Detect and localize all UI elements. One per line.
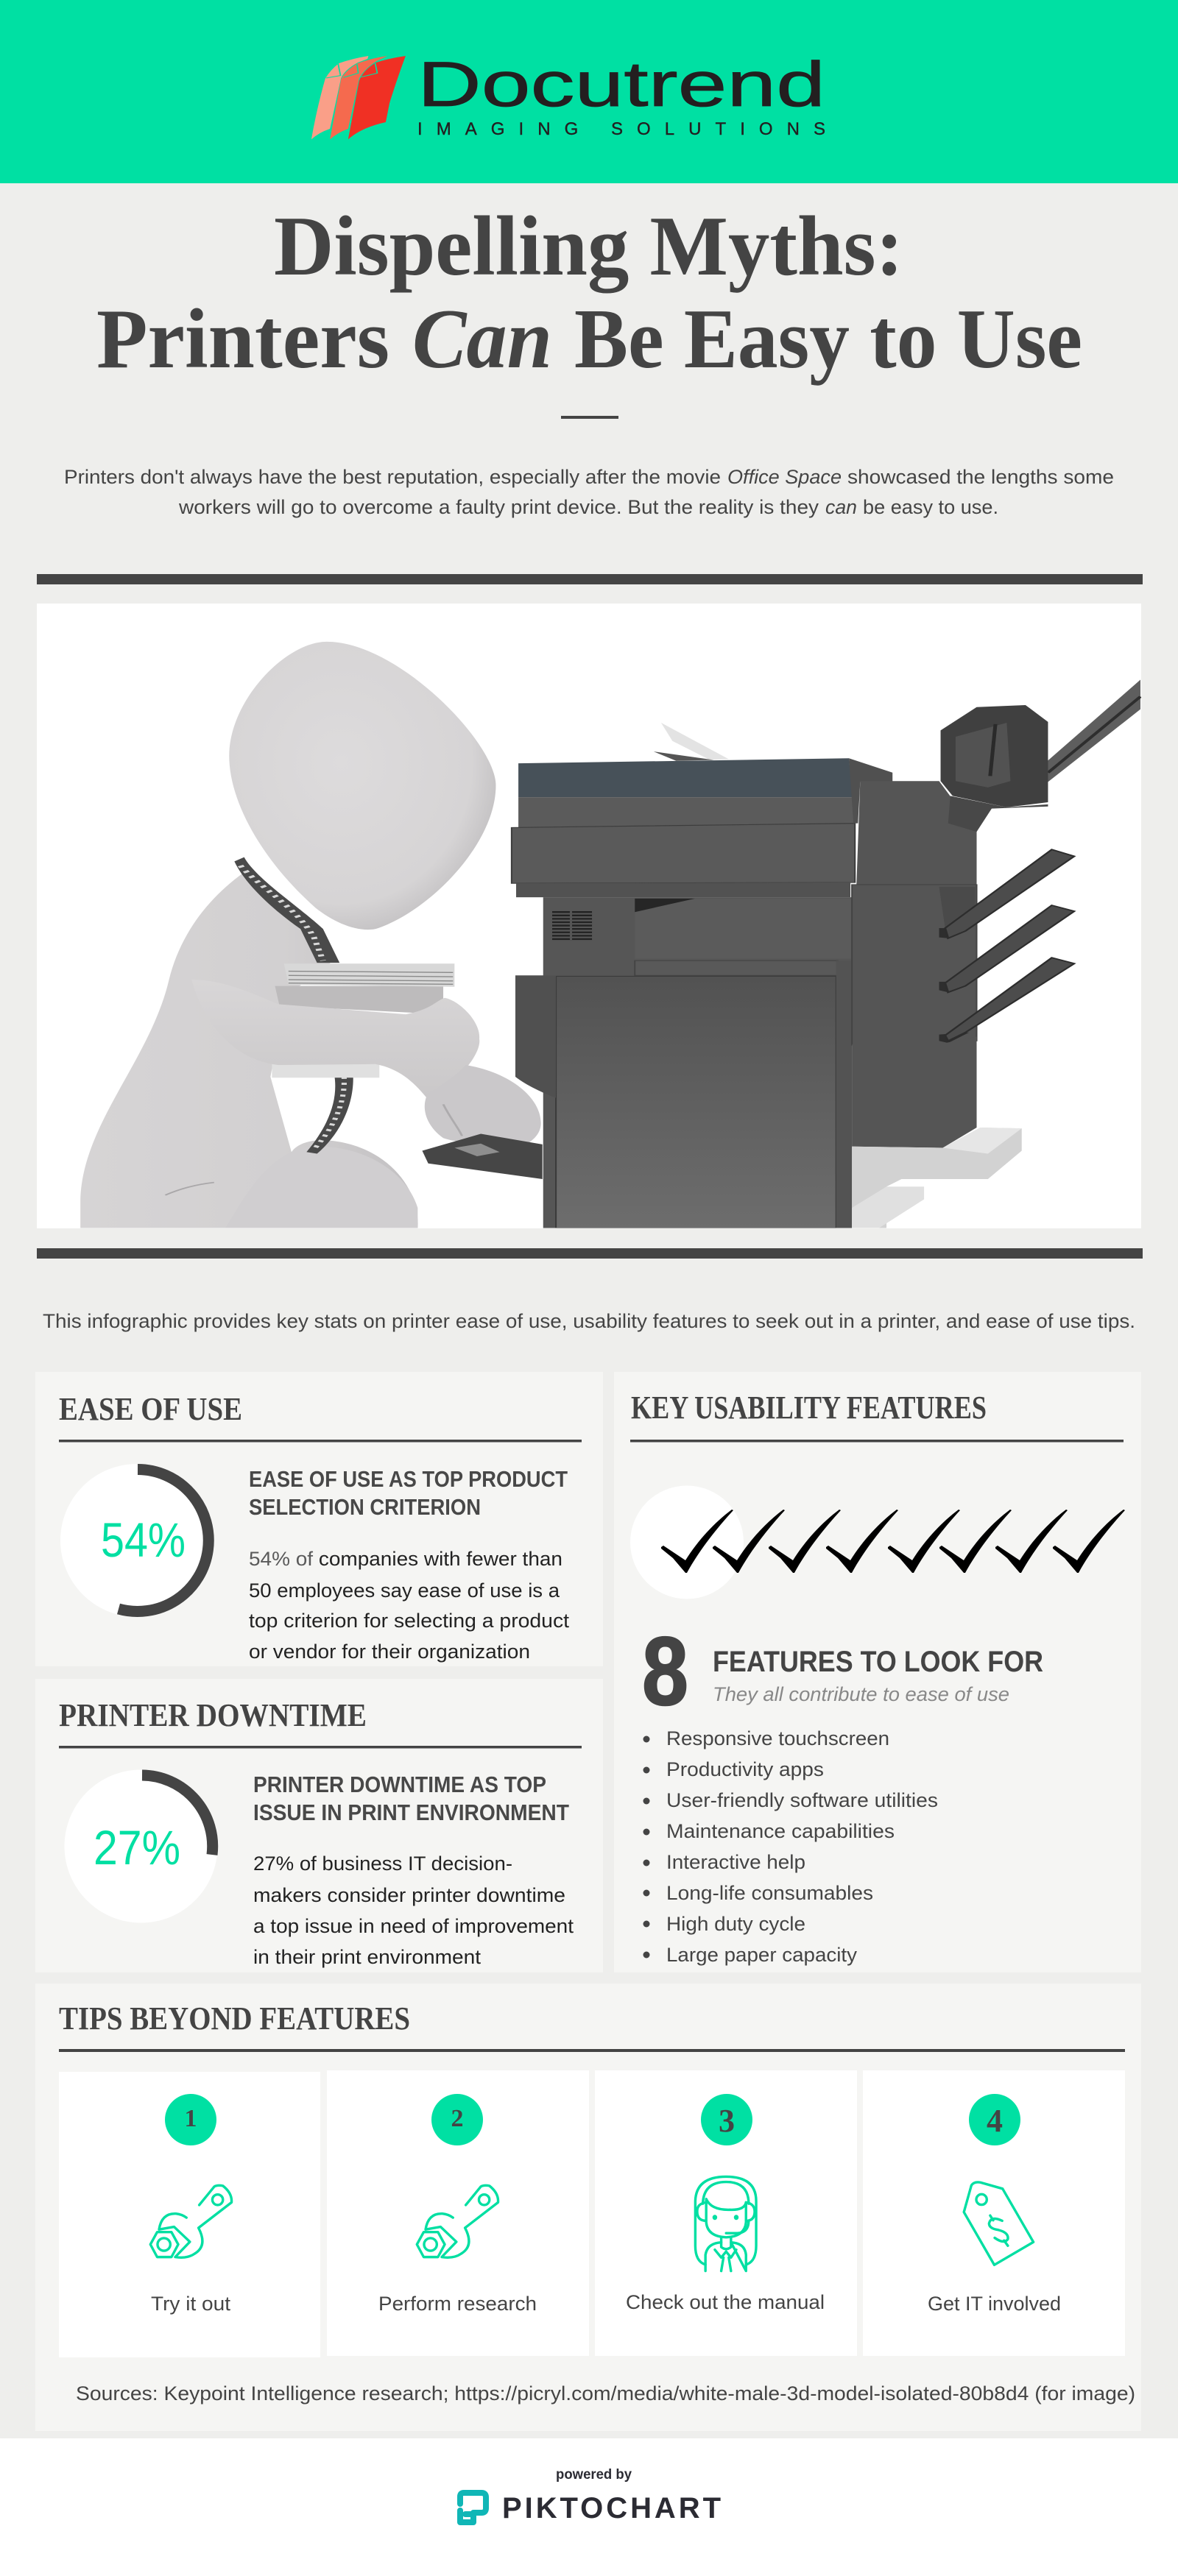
arm and hands	[272, 998, 480, 1097]
subheading: PRINTER DOWNTIME AS TOP	[253, 1772, 546, 1797]
title: Can	[412, 292, 552, 386]
subheading	[253, 1772, 569, 1825]
icon: wrench and nut	[417, 2185, 498, 2257]
icon: support person with headset	[695, 2176, 756, 2271]
panel: ease of use	[35, 1372, 603, 1666]
top output arm	[1048, 680, 1140, 782]
tip card 1	[59, 2072, 320, 2357]
header banner	[0, 0, 1178, 183]
base shelf	[852, 1128, 1022, 1228]
logo: Docutrend: IMAGING SOLUTIONS	[417, 119, 825, 139]
feature list: High duty cycle	[666, 1913, 805, 1935]
footer: powered by Piktochart	[0, 2438, 1178, 2576]
tip card 3: 3	[719, 2103, 735, 2139]
body text: 27% of business IT decision-	[253, 1853, 512, 1875]
title: Be Easy to Use	[574, 292, 1082, 386]
summary sentence: This infographic provides key stats on printer ease of use, usability features to seek out in a printer, and ease of use tips.	[43, 1310, 1135, 1332]
panel: tips beyond features	[35, 1984, 1141, 2431]
body text	[253, 1853, 574, 1968]
tip card 4: 4	[987, 2103, 1003, 2139]
subheading	[249, 1466, 568, 1520]
feature list: User-friendly software utilities	[666, 1789, 938, 1811]
intro paragraph	[64, 466, 1114, 518]
paper feeder	[661, 723, 729, 760]
tie	[234, 857, 339, 963]
tip card 2: Perform research	[378, 2293, 537, 2315]
feature list: Long-life consumables	[666, 1882, 873, 1904]
tip card 4	[863, 2070, 1125, 2356]
footer: powered by Piktochart: powered by	[556, 2467, 632, 2483]
body text: 50 employees say ease of use is a	[249, 1579, 560, 1602]
feature list: Productivity apps	[666, 1758, 824, 1780]
heading: ease of use: EASE OF USE	[59, 1391, 242, 1427]
logo: Docutrend: Docutrend	[417, 49, 825, 120]
tip card 3	[595, 2070, 857, 2356]
heading: key usability features: KEY USABILITY FEATURES	[631, 1390, 987, 1426]
figure body	[80, 870, 418, 1228]
heading: printer downtime: PRINTER DOWNTIME	[59, 1697, 367, 1733]
donut chart: 54%	[60, 1464, 214, 1617]
paper stack and book	[272, 1064, 379, 1078]
panel: printer downtime	[35, 1679, 603, 1972]
feature list: Large paper capacity	[666, 1944, 858, 1966]
intro paragraph: can	[825, 496, 857, 518]
icon: wrench and nut	[150, 2185, 232, 2257]
title: Dispelling Myths:	[274, 199, 903, 293]
tip card 3: Check out the manual	[626, 2291, 825, 2313]
subheading: ISSUE IN PRINT ENVIRONMENT	[253, 1800, 569, 1825]
subheading: SELECTION CRITERION	[249, 1494, 481, 1520]
tip card 2	[327, 2070, 589, 2356]
icon row: eight check marks	[661, 1510, 1125, 1573]
donut chart: 54%: 54%	[101, 1512, 186, 1567]
big number 8: 8	[642, 1617, 688, 1725]
body text: or vendor for their organization	[249, 1641, 530, 1663]
donut chart: 27%: 27%	[94, 1820, 180, 1875]
feature list: Responsive touchscreen	[666, 1727, 889, 1749]
title: Printers	[96, 292, 389, 386]
subheading: EASE OF USE AS TOP PRODUCT	[249, 1466, 568, 1492]
intro paragraph: be easy to use.	[863, 496, 998, 518]
tip card 1: Try it out	[151, 2293, 231, 2315]
photo: 3D figure using a printer	[37, 604, 1141, 1228]
sources line: Sources: Keypoint Intelligence research; https://picryl.com/media/white-male-3d-model-isolated-80b8d4 (for image)	[76, 2382, 1135, 2405]
finisher column	[856, 781, 977, 885]
body text: top criterion for selecting a product	[249, 1610, 570, 1632]
tip card 2: 2	[451, 2105, 464, 2132]
tip card 1: 1	[184, 2105, 197, 2132]
body text: in their print environment	[253, 1946, 482, 1968]
intro paragraph: showcased the lengths some	[847, 466, 1114, 488]
donut chart: 27%	[65, 1769, 218, 1922]
heading: tips: TIPS BEYOND FEATURES	[59, 2000, 410, 2037]
body text	[249, 1548, 570, 1663]
body text: a top issue in need of improvement	[253, 1915, 574, 1937]
icon: Piktochart logo	[460, 2493, 486, 2522]
feature list: Maintenance capabilities	[666, 1820, 895, 1842]
icon: price tag	[964, 2182, 1034, 2265]
logo: Docutrend	[311, 49, 825, 139]
printer lower unit	[543, 897, 852, 1228]
intro paragraph: Printers don't always have the best reputation, especially after the movie	[64, 466, 721, 488]
head	[229, 642, 495, 930]
features heading	[713, 1646, 1043, 1705]
body text: makers consider printer downtime	[253, 1884, 565, 1906]
intro paragraph: workers will go to overcome a faulty print device. But the reality is they	[178, 496, 819, 518]
keypad tray	[422, 1134, 543, 1179]
white circle behind checks	[630, 1485, 744, 1599]
vent	[552, 912, 592, 939]
intro paragraph: Office Space	[727, 466, 842, 488]
features heading: They all contribute to ease of use	[713, 1683, 1009, 1705]
trays	[945, 849, 1074, 938]
features heading: FEATURES TO LOOK FOR	[713, 1646, 1043, 1678]
tip card 4: Get IT involved	[928, 2293, 1061, 2315]
leg	[364, 1156, 418, 1228]
title	[96, 199, 1082, 386]
feature list	[643, 1727, 938, 1966]
body text: 54% of companies with fewer than	[249, 1548, 562, 1570]
panel: key usability features	[614, 1372, 1141, 1972]
printer door	[556, 976, 836, 1228]
footer: powered by Piktochart: PIKTOCHART	[502, 2492, 721, 2524]
scanner top	[518, 758, 853, 797]
feature list: Interactive help	[666, 1851, 805, 1873]
